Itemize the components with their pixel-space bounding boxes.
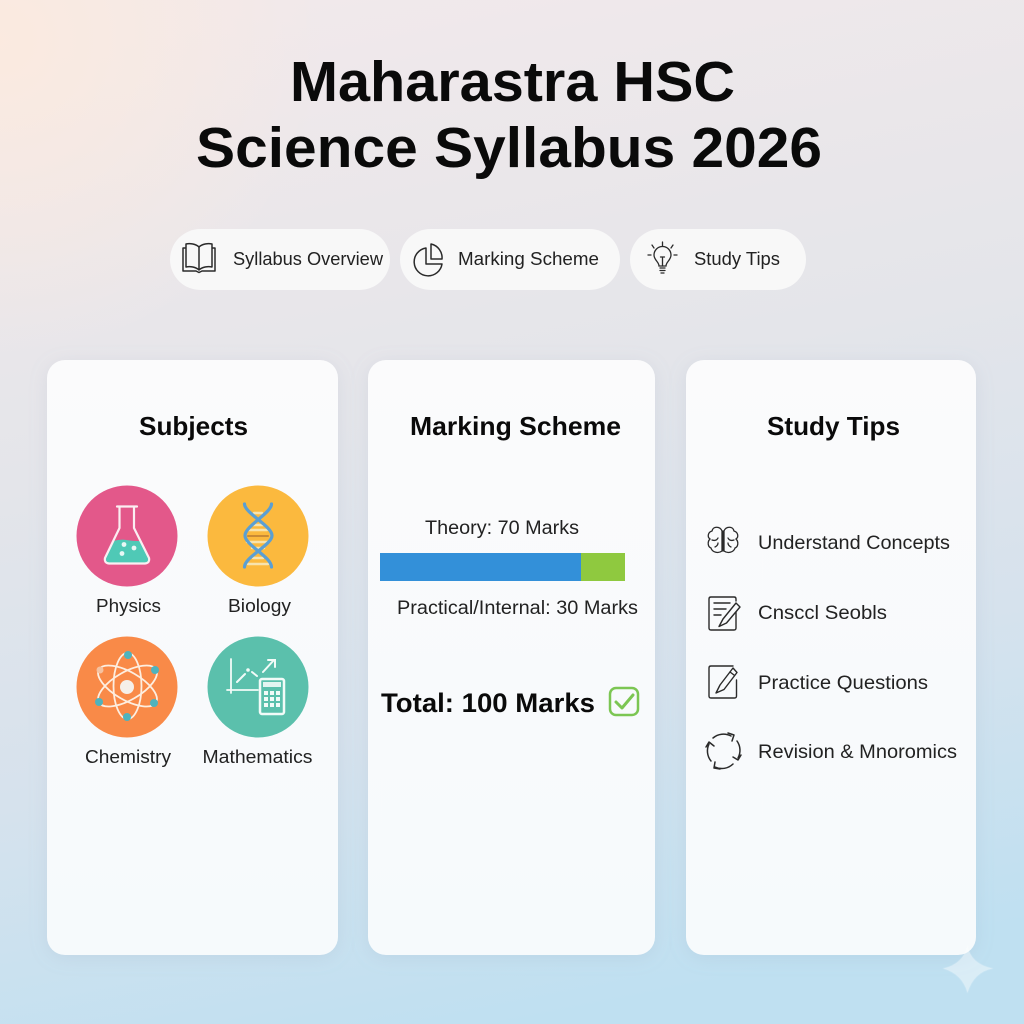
pill: study tips <box>630 229 806 290</box>
icon: atom <box>92 651 163 721</box>
label: biology: Biology <box>228 595 292 616</box>
tip: cnsccl seobls: Cnsccl Seobls <box>758 602 887 624</box>
icon: dna helix <box>244 504 272 567</box>
icon: graph and calculator <box>227 659 284 714</box>
stacked bar: marks split <box>380 553 625 581</box>
tip: revision and mnoromics <box>706 733 957 769</box>
icon: revision cycle <box>706 733 741 769</box>
total marks: Total: 100 Marks <box>381 688 595 718</box>
icon: notes with pencil <box>709 597 740 630</box>
navigation pills <box>170 229 806 290</box>
subject: biology <box>208 486 308 616</box>
label: practical marks: Practical/Internal: 30 Marks <box>397 598 638 619</box>
pill: marking scheme <box>400 229 620 290</box>
panel: subjects <box>47 360 338 955</box>
tip: practice questions: Practice Questions <box>758 672 928 694</box>
icon: open book <box>183 244 215 272</box>
icon: light bulb <box>648 242 677 273</box>
panel: study tips <box>686 360 976 955</box>
heading: marking scheme: Marking Scheme <box>410 411 621 441</box>
subject: chemistry <box>76 636 178 767</box>
panel: marking scheme <box>368 360 655 955</box>
title <box>196 50 822 180</box>
tip: understand concepts <box>708 527 950 554</box>
subject: mathematics <box>202 636 312 767</box>
label: physics: Physics <box>96 595 161 616</box>
tip: cnsccl seobls <box>709 597 887 630</box>
title: Maharastra HSC <box>290 50 735 114</box>
icon: pie chart <box>414 244 442 276</box>
heading: study tips: Study Tips <box>767 411 900 441</box>
icon: corner sparkle <box>944 946 992 992</box>
label: mathematics: Mathematics <box>202 746 312 767</box>
icon: green check box <box>610 688 638 715</box>
tip: revision and mnoromics: Revision & Mnoromics <box>758 741 957 763</box>
pill: marking scheme: Marking Scheme <box>458 249 599 269</box>
icon: brain <box>708 527 738 552</box>
label: theory marks: Theory: 70 Marks <box>425 518 579 539</box>
heading: subjects: Subjects <box>139 411 248 441</box>
pill: syllabus overview: Syllabus Overview <box>233 249 384 269</box>
title: Science Syllabus 2026 <box>196 116 822 180</box>
label: chemistry: Chemistry <box>85 746 172 767</box>
icon: flask <box>105 506 150 564</box>
pill: study tips: Study Tips <box>694 249 780 269</box>
tip: practice questions <box>709 666 928 698</box>
subject: physics <box>76 486 178 616</box>
tip: understand concepts: Understand Concepts <box>758 532 950 554</box>
pill: syllabus overview <box>170 229 390 290</box>
icon: pad with pencil <box>709 666 737 698</box>
